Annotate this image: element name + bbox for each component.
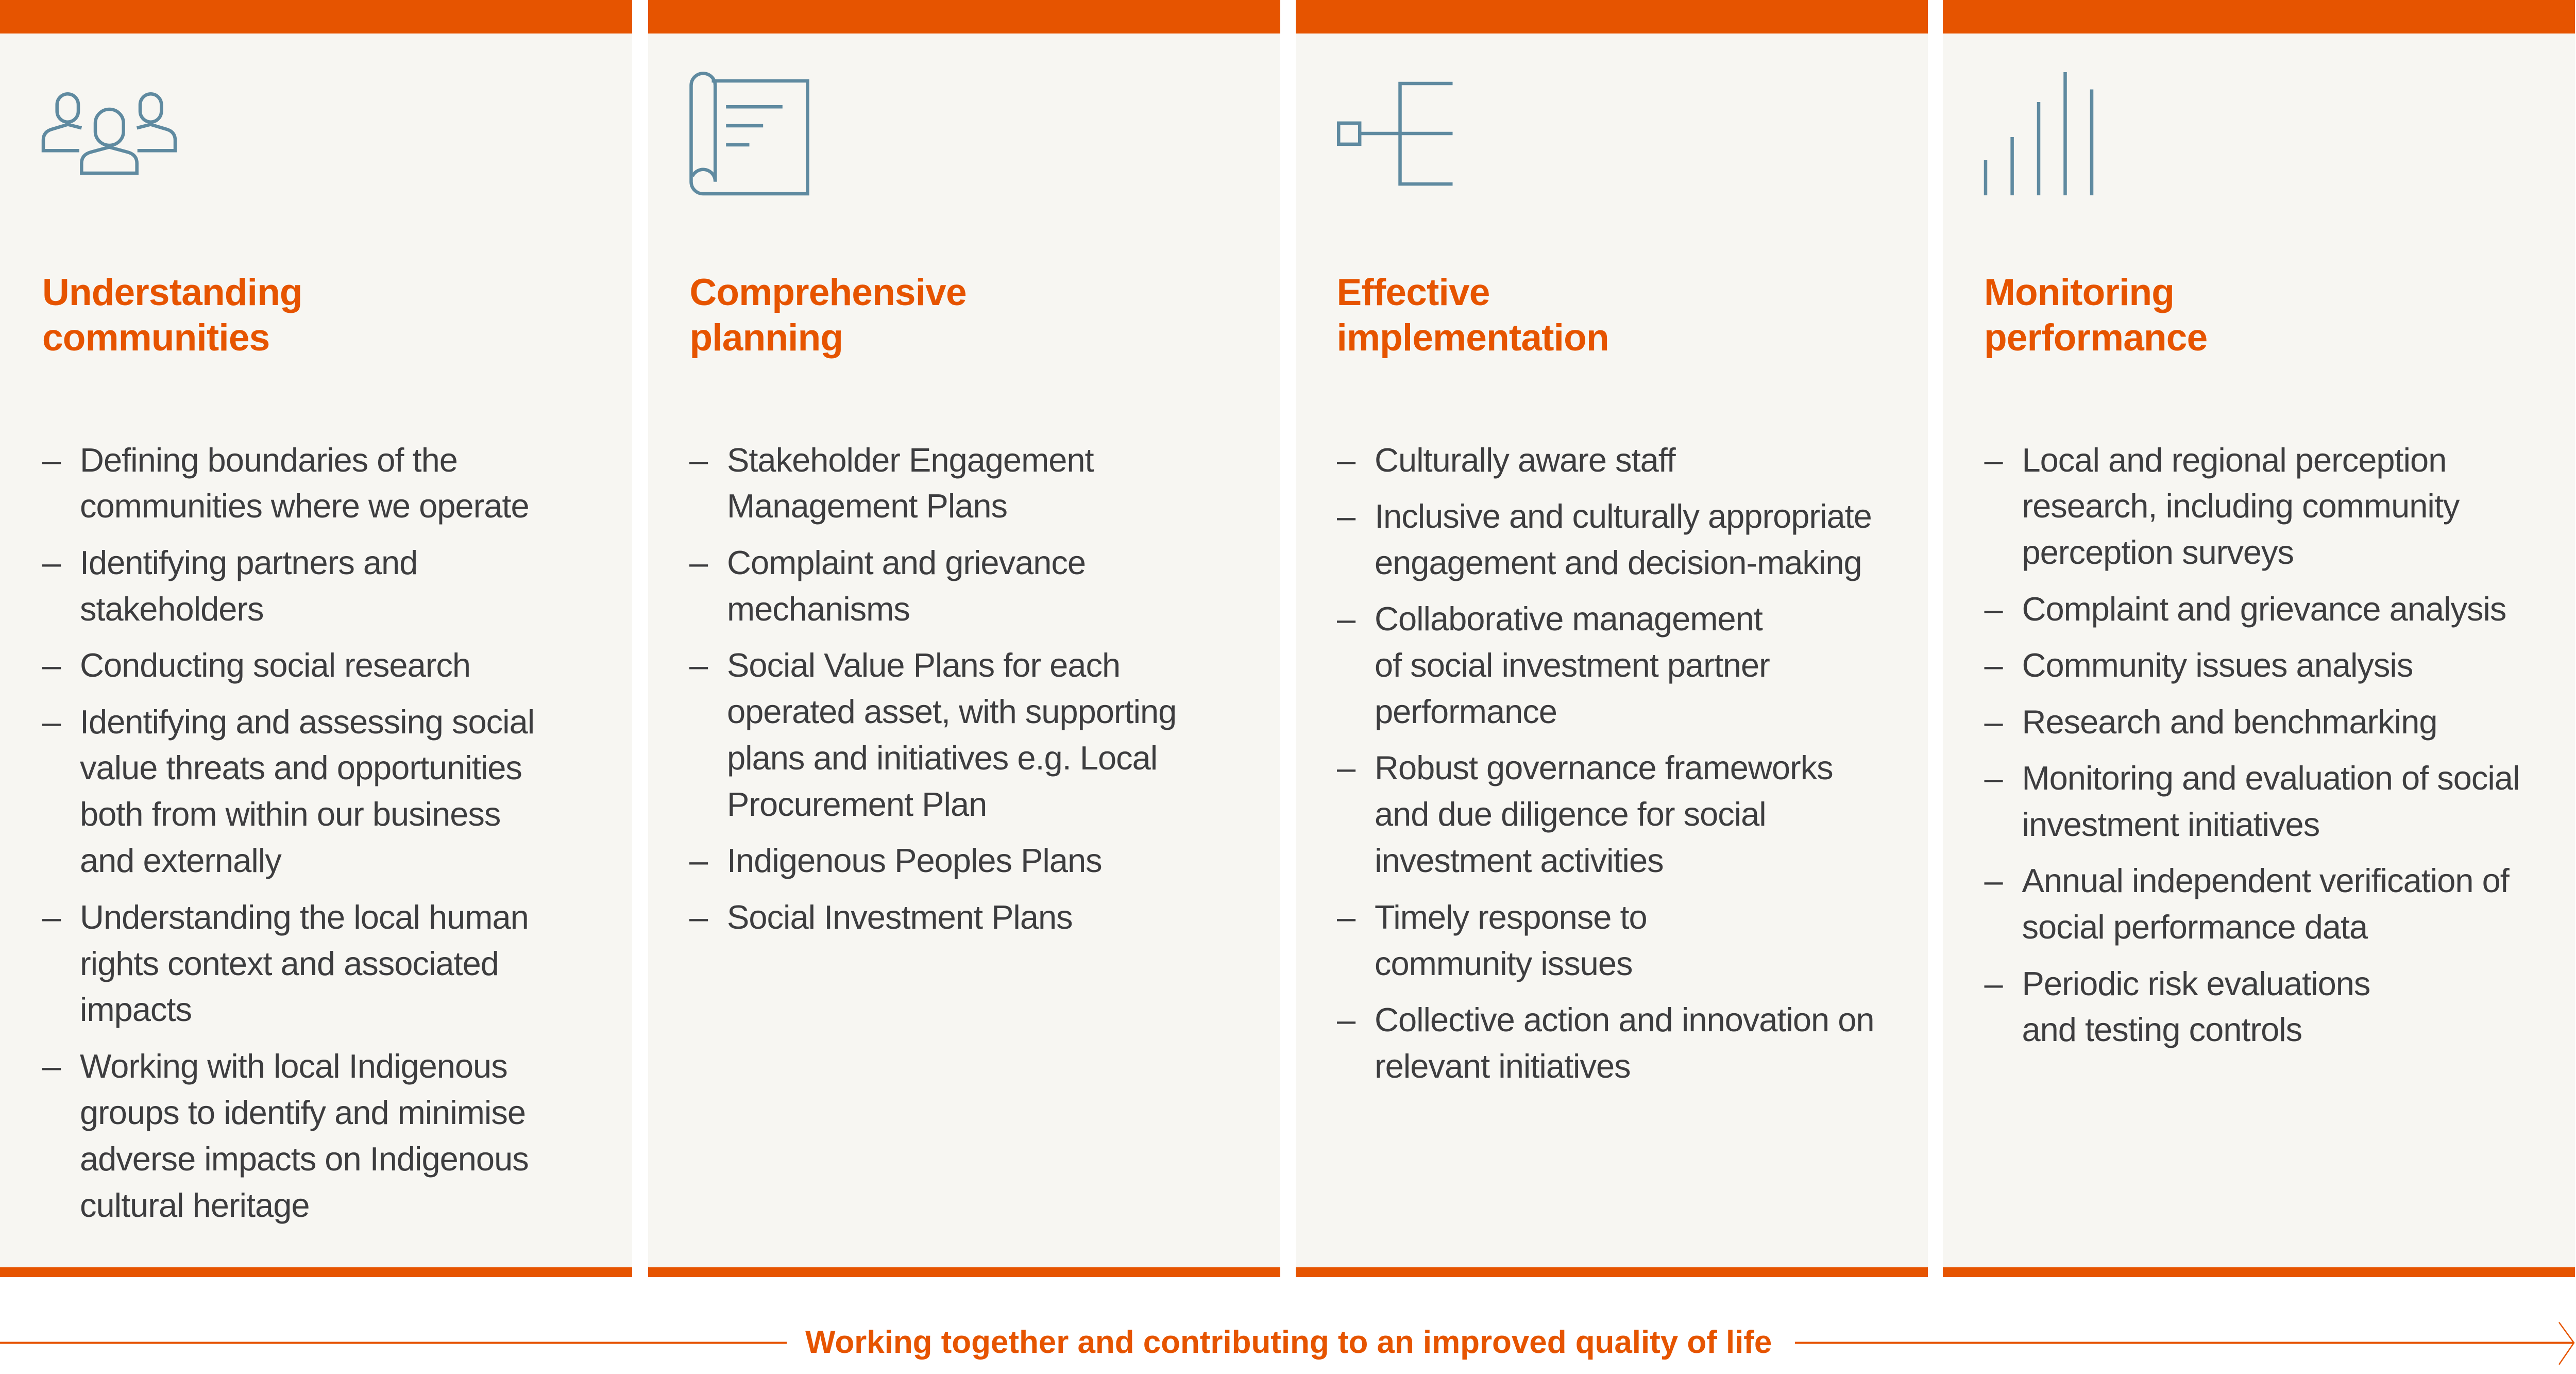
arrow: full-width timeline bbox=[0, 1322, 2575, 1365]
list: comprehensive planning: operated asset, with supporting bbox=[727, 693, 1176, 730]
list: comprehensive planning: Social Value Plans for each bbox=[727, 646, 1120, 684]
list: effective implementation: Robust governance frameworks bbox=[1375, 749, 1833, 786]
panel: understanding communities: – bbox=[42, 441, 61, 478]
list: understanding communities: groups to identify and minimise bbox=[80, 1094, 526, 1131]
list: effective implementation bbox=[1337, 441, 1874, 1085]
list: monitoring performance: Local and regional perception bbox=[2022, 441, 2446, 478]
panel: effective implementation: – bbox=[1337, 497, 1355, 535]
panel: comprehensive planning: – bbox=[689, 544, 708, 581]
heading: Comprehensive bbox=[689, 272, 967, 313]
list: effective implementation: Collective action and innovation on bbox=[1375, 1001, 1874, 1038]
list: understanding communities: Identifying partners and bbox=[80, 544, 417, 581]
icon: branching tree bbox=[1336, 81, 1453, 186]
list: understanding communities: cultural heritage bbox=[80, 1186, 309, 1224]
bottom accent bar bbox=[648, 1267, 1280, 1277]
list: comprehensive planning: Social Investment Plans bbox=[727, 898, 1073, 936]
top accent bar bbox=[1943, 0, 2575, 33]
panel: monitoring performance: – bbox=[1985, 703, 2003, 741]
panel: effective implementation bbox=[1295, 0, 1928, 1277]
heading: Effective bbox=[1336, 272, 1490, 313]
icon: bar lines bbox=[1984, 72, 2094, 195]
list: effective implementation: Culturally aware staff bbox=[1375, 441, 1675, 478]
heading: planning bbox=[689, 317, 843, 359]
list: comprehensive planning: Complaint and grievance bbox=[727, 544, 1086, 581]
list: comprehensive planning: Stakeholder Engagement bbox=[727, 441, 1094, 478]
list: monitoring performance: Complaint and grievance analysis bbox=[2022, 590, 2506, 628]
heading bbox=[1336, 272, 1609, 359]
list: understanding communities: Working with local Indigenous bbox=[80, 1047, 507, 1085]
panel: monitoring performance: – bbox=[1985, 862, 2003, 899]
panel: understanding communities: – bbox=[42, 1047, 61, 1085]
list: understanding communities: impacts bbox=[80, 991, 192, 1028]
list: effective implementation: relevant initiatives bbox=[1375, 1047, 1631, 1085]
list: monitoring performance: Monitoring and evaluation of social bbox=[2022, 759, 2519, 797]
list: monitoring performance: social performance data bbox=[2022, 908, 2367, 946]
list: effective implementation: community issues bbox=[1375, 945, 1633, 982]
list: comprehensive planning: Indigenous Peoples Plans bbox=[727, 842, 1102, 879]
panel: monitoring performance bbox=[1943, 0, 2575, 1277]
list: effective implementation: Collaborative management bbox=[1375, 600, 1762, 638]
list: effective implementation: of social investment partner bbox=[1375, 646, 1770, 684]
heading: implementation bbox=[1336, 317, 1609, 359]
panel: monitoring performance: – bbox=[1985, 965, 2003, 1002]
list: monitoring performance: investment initiatives bbox=[2022, 806, 2319, 843]
panel: understanding communities: – bbox=[42, 646, 61, 684]
panel: effective implementation: – bbox=[1337, 1001, 1355, 1038]
heading bbox=[42, 272, 302, 359]
list: effective implementation: engagement and decision-making bbox=[1375, 544, 1862, 581]
list: comprehensive planning: plans and initiatives e.g. Local bbox=[727, 739, 1157, 777]
list: comprehensive planning bbox=[689, 441, 1176, 936]
panel: effective implementation: – bbox=[1337, 600, 1355, 638]
list: understanding communities: communities where we operate bbox=[80, 487, 529, 525]
bottom accent bar bbox=[1295, 1267, 1928, 1277]
panel: effective implementation: – bbox=[1337, 898, 1355, 936]
panel: comprehensive planning: – bbox=[689, 646, 708, 684]
top accent bar bbox=[0, 0, 632, 33]
list: understanding communities: Defining boundaries of the bbox=[80, 441, 457, 478]
panel: monitoring performance: – bbox=[1985, 759, 2003, 797]
list: understanding communities: stakeholders bbox=[80, 590, 264, 628]
callout: bottom tagline: Working together and contributing to an improved quality of life bbox=[805, 1325, 1772, 1360]
list: understanding communities: both from within our business bbox=[80, 795, 500, 833]
panel: comprehensive planning: – bbox=[689, 842, 708, 879]
panel: monitoring performance: – bbox=[1985, 441, 2003, 478]
heading: Understanding bbox=[42, 272, 302, 313]
top accent bar bbox=[648, 0, 1280, 33]
list: monitoring performance: research, including community bbox=[2022, 487, 2459, 525]
top accent bar bbox=[1295, 0, 1928, 33]
panel: understanding communities: – bbox=[42, 544, 61, 581]
list: monitoring performance: Periodic risk evaluations bbox=[2022, 965, 2370, 1002]
list: comprehensive planning: Management Plans bbox=[727, 487, 1007, 525]
heading: Monitoring bbox=[1984, 272, 2174, 313]
panel: understanding communities: – bbox=[42, 703, 61, 741]
list: monitoring performance: Research and benchmarking bbox=[2022, 703, 2437, 741]
list: effective implementation: and due diligence for social bbox=[1375, 795, 1766, 833]
list: monitoring performance: Community issues analysis bbox=[2022, 646, 2413, 684]
panel: comprehensive planning: – bbox=[689, 441, 708, 478]
heading: performance bbox=[1984, 317, 2207, 359]
list: understanding communities: Understanding the local human bbox=[80, 898, 529, 936]
list: effective implementation: performance bbox=[1375, 693, 1557, 730]
panel: comprehensive planning bbox=[648, 0, 1280, 1277]
panel: effective implementation: – bbox=[1337, 441, 1355, 478]
list: understanding communities bbox=[42, 441, 534, 1224]
panel: understanding communities: – bbox=[42, 898, 61, 936]
list: effective implementation: Timely response to bbox=[1375, 898, 1647, 936]
list: monitoring performance bbox=[1985, 441, 2519, 1048]
icon: three people bbox=[41, 92, 177, 175]
list: monitoring performance: Annual independent verification of bbox=[2022, 862, 2509, 899]
list: effective implementation: investment activities bbox=[1375, 842, 1664, 879]
list: understanding communities: and externally bbox=[80, 842, 281, 879]
list: comprehensive planning: Procurement Plan bbox=[727, 785, 987, 823]
panel: monitoring performance: – bbox=[1985, 590, 2003, 628]
list: understanding communities: Identifying and assessing social bbox=[80, 703, 534, 741]
list: monitoring performance: perception surveys bbox=[2022, 533, 2294, 571]
bottom accent bar bbox=[0, 1267, 632, 1277]
list: understanding communities: Conducting social research bbox=[80, 646, 470, 684]
heading bbox=[1984, 272, 2207, 359]
bottom accent bar bbox=[1943, 1267, 2575, 1277]
panel: effective implementation: – bbox=[1337, 749, 1355, 786]
list: monitoring performance: and testing controls bbox=[2022, 1011, 2302, 1048]
list: understanding communities: value threats and opportunities bbox=[80, 749, 522, 786]
panel: understanding communities bbox=[0, 0, 632, 1277]
list: understanding communities: rights context and associated bbox=[80, 945, 499, 982]
icon: document scroll bbox=[689, 72, 809, 196]
heading: communities bbox=[42, 317, 269, 359]
list: effective implementation: Inclusive and culturally appropriate bbox=[1375, 497, 1872, 535]
heading bbox=[689, 272, 967, 359]
list: understanding communities: adverse impacts on Indigenous bbox=[80, 1140, 529, 1178]
panel: monitoring performance: – bbox=[1985, 646, 2003, 684]
panel: comprehensive planning: – bbox=[689, 898, 708, 936]
list: comprehensive planning: mechanisms bbox=[727, 590, 910, 628]
